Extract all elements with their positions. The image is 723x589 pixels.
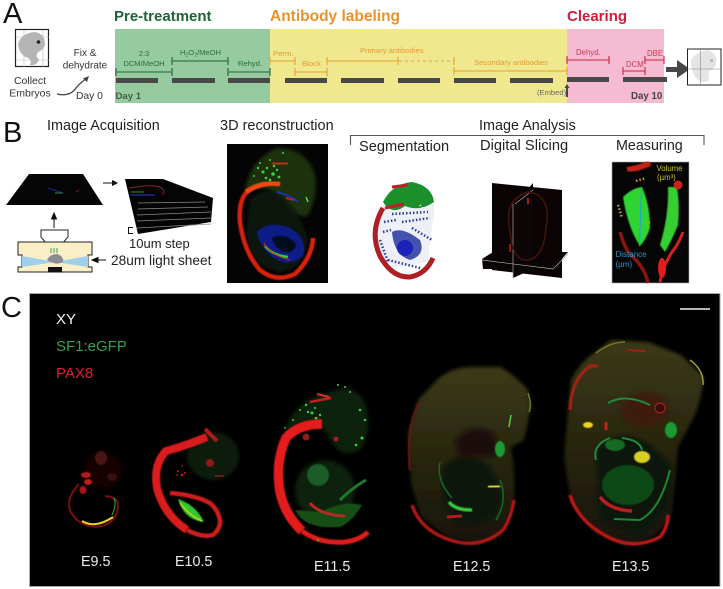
text: embed: (Embed) xyxy=(537,88,567,97)
image stack xyxy=(125,179,213,234)
arrow: plane to stack xyxy=(103,180,117,186)
microscopy background xyxy=(30,294,720,586)
embryo E10.5 xyxy=(156,429,239,536)
image: measuring: Distance xyxy=(616,250,647,259)
arrow: fixation step xyxy=(57,76,89,95)
clearing steps: Dehyd. xyxy=(576,48,601,57)
image: segmentation xyxy=(375,182,434,277)
embryo E13.5 xyxy=(564,340,704,547)
embryo E12.5 xyxy=(408,367,531,545)
clearing steps: DCM xyxy=(626,60,644,69)
text: fix and dehydrate: Fix & xyxy=(74,48,97,59)
image: measuring: Volume xyxy=(656,164,683,173)
stage labels: E13.5 xyxy=(612,559,649,575)
pre-treatment steps: Rehyd. xyxy=(238,59,262,68)
clearing steps xyxy=(567,48,664,75)
scale bar xyxy=(680,308,710,310)
legend: sample and channels: SF1:eGFP xyxy=(56,338,127,355)
arrow: embed xyxy=(564,84,570,97)
panel letter B: B xyxy=(3,117,22,149)
heading: measuring: Measuring xyxy=(616,138,683,154)
arrow: to cleared embryo xyxy=(666,60,690,78)
stage labels: E12.5 xyxy=(453,559,490,575)
image: measuring: (µm³) xyxy=(657,173,676,182)
embryo E11.5 xyxy=(278,384,368,542)
icon: cleared embryo xyxy=(688,49,721,85)
heading: image analysis: Image Analysis xyxy=(479,118,576,134)
heading: pre-treatment: Pre-treatment xyxy=(114,8,212,25)
pre-treatment steps xyxy=(116,48,270,76)
phase band: clearing xyxy=(567,29,664,103)
image: 3D reconstruction xyxy=(227,144,328,283)
image: digital slicing xyxy=(482,183,568,278)
text: collect embryos: Embryos xyxy=(9,88,51,100)
pre-treatment steps: DCM/MeOH xyxy=(123,59,165,68)
image: measuring: (µm) xyxy=(616,260,632,269)
embryo E9.5 xyxy=(69,451,122,527)
text: day 10: Day 10 xyxy=(631,91,662,102)
pre-treatment steps: /MeOH xyxy=(197,48,221,57)
image plane xyxy=(6,174,103,205)
heading: clearing: Clearing xyxy=(567,8,627,25)
stage labels: E10.5 xyxy=(175,554,212,570)
pre-treatment steps: O xyxy=(188,48,194,57)
heading: antibody labeling: Antibody labeling xyxy=(270,8,400,25)
heading: digital slicing: Digital Slicing xyxy=(480,138,568,154)
pre-treatment steps: 2 xyxy=(194,52,197,58)
pre-treatment steps: 2:3 xyxy=(139,49,149,58)
pre-treatment steps: H xyxy=(180,48,185,57)
text: day 0: Day 0 xyxy=(76,91,103,102)
text: light sheet: 28um light sheet xyxy=(111,253,212,268)
panel letter C: C xyxy=(1,292,22,324)
text: step size: 10um step xyxy=(129,236,190,251)
stage labels: E9.5 xyxy=(81,554,110,570)
phase band: antibody labeling xyxy=(270,29,567,103)
antibody steps: Block xyxy=(302,59,321,68)
bracket: image analysis xyxy=(350,136,704,145)
antibody steps xyxy=(270,46,567,76)
day bars xyxy=(116,77,667,83)
pre-treatment steps: 2 xyxy=(185,52,188,58)
clearing steps: DBE xyxy=(647,49,663,58)
stage labels xyxy=(81,554,649,575)
panel C: embryo series xyxy=(1,292,720,586)
stage labels: E11.5 xyxy=(314,559,350,575)
text: collect embryos: Collect xyxy=(14,75,46,87)
image: measuring xyxy=(612,162,689,283)
icon: collected embryo xyxy=(16,30,49,67)
antibody steps: Secondary antibodies xyxy=(474,58,548,67)
objective xyxy=(41,230,68,244)
text: fix and dehydrate: dehydrate xyxy=(63,60,108,72)
panel B: imaging workflow xyxy=(3,117,704,283)
heading: image acquisition: Image Acquisition xyxy=(47,118,160,134)
arrow: up to plane xyxy=(52,213,56,228)
panel A: protocol timeline xyxy=(3,0,721,103)
text: day 1: Day 1 xyxy=(116,91,142,102)
heading: segmentation: Segmentation xyxy=(359,139,449,155)
bracket: step size xyxy=(128,228,133,234)
arrow: light sheet xyxy=(92,258,106,262)
legend: sample and channels: XY xyxy=(56,311,76,328)
legend: sample and channels xyxy=(56,311,127,382)
light sheet chamber xyxy=(18,242,92,272)
antibody steps: Perm. xyxy=(273,49,294,58)
legend: sample and channels: PAX8 xyxy=(56,365,93,382)
heading: 3D reconstruction: 3D reconstruction xyxy=(220,118,334,134)
antibody steps: Primary antibodies xyxy=(360,46,424,55)
phase band: pre-treatment xyxy=(115,29,270,103)
